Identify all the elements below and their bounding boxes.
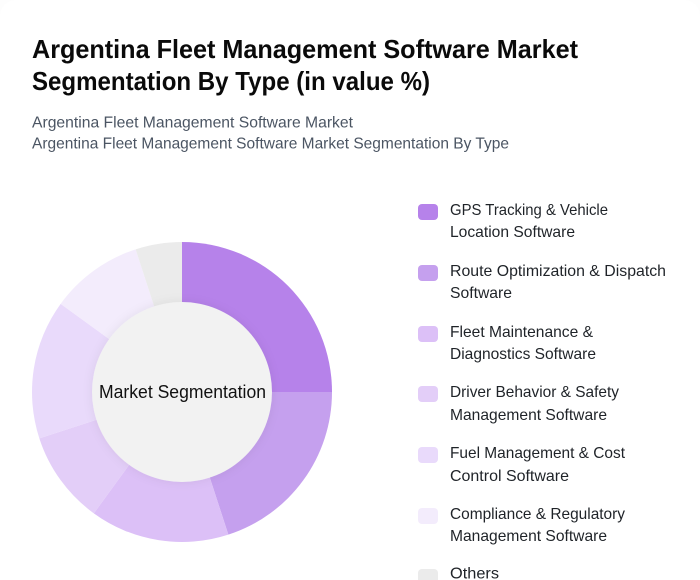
slice: Driver Behavior & Safety Management Software: [39, 392, 182, 513]
legend item: Fuel Management: [418, 445, 626, 485]
slice: Compliance & Regulatory Management Software: [61, 249, 182, 392]
legend item: Driver Behavior: [418, 384, 619, 424]
legend item: GPS Tracking: GPS Tracking & Vehicle: [450, 202, 608, 219]
legend item: Fuel Management: Control Software: [450, 468, 569, 485]
legend item: GPS Tracking: [418, 202, 608, 241]
legend item: Route Optimization: Route Optimization & Dispatch: [450, 263, 666, 280]
donut chart: [32, 242, 332, 542]
legend item: Others: [418, 566, 499, 580]
donut centre: [92, 302, 272, 482]
subtitle: Argentina Fleet Management Software Market: [32, 114, 354, 132]
legend item: Driver Behavior: Driver Behavior & Safety: [450, 384, 619, 401]
slice: Fleet Maintenance & Diagnostics Software: [94, 392, 228, 542]
legend item: Fleet Maintenance: Diagnostics Software: [450, 346, 596, 363]
slice: Route Optimization & Dispatch Software: [182, 392, 332, 535]
legend item: GPS Tracking: Location Software: [450, 224, 575, 241]
legend item: Compliance: Management Software: [450, 528, 607, 545]
subtitle: [32, 114, 509, 152]
slice: GPS Tracking & Vehicle Location Software: [182, 242, 332, 392]
title: [32, 34, 578, 96]
slice: Fuel Management & Cost Control Software: [32, 304, 182, 438]
legend item: Route Optimization: Software: [450, 285, 512, 302]
subtitle: Argentina Fleet Management Software Market Segmentation By Type: [32, 136, 509, 152]
slice: Others: [136, 242, 182, 392]
legend item: Driver Behavior: Management Software: [450, 407, 607, 424]
legend: [418, 202, 666, 580]
legend item: Fuel Management: Fuel Management & Cost: [450, 445, 626, 462]
legend item: Compliance: [418, 506, 625, 545]
title: Argentina Fleet Management Software Market: [32, 34, 578, 64]
title: Segmentation By Type (in value %): [32, 66, 430, 96]
legend item: Route Optimization: [418, 263, 666, 302]
centre label: Market Segmentation: [99, 382, 266, 402]
legend item: Fleet Maintenance: Fleet Maintenance &: [450, 324, 593, 341]
legend item: Compliance: Compliance & Regulatory: [450, 506, 625, 523]
legend item: Fleet Maintenance: [418, 324, 596, 363]
